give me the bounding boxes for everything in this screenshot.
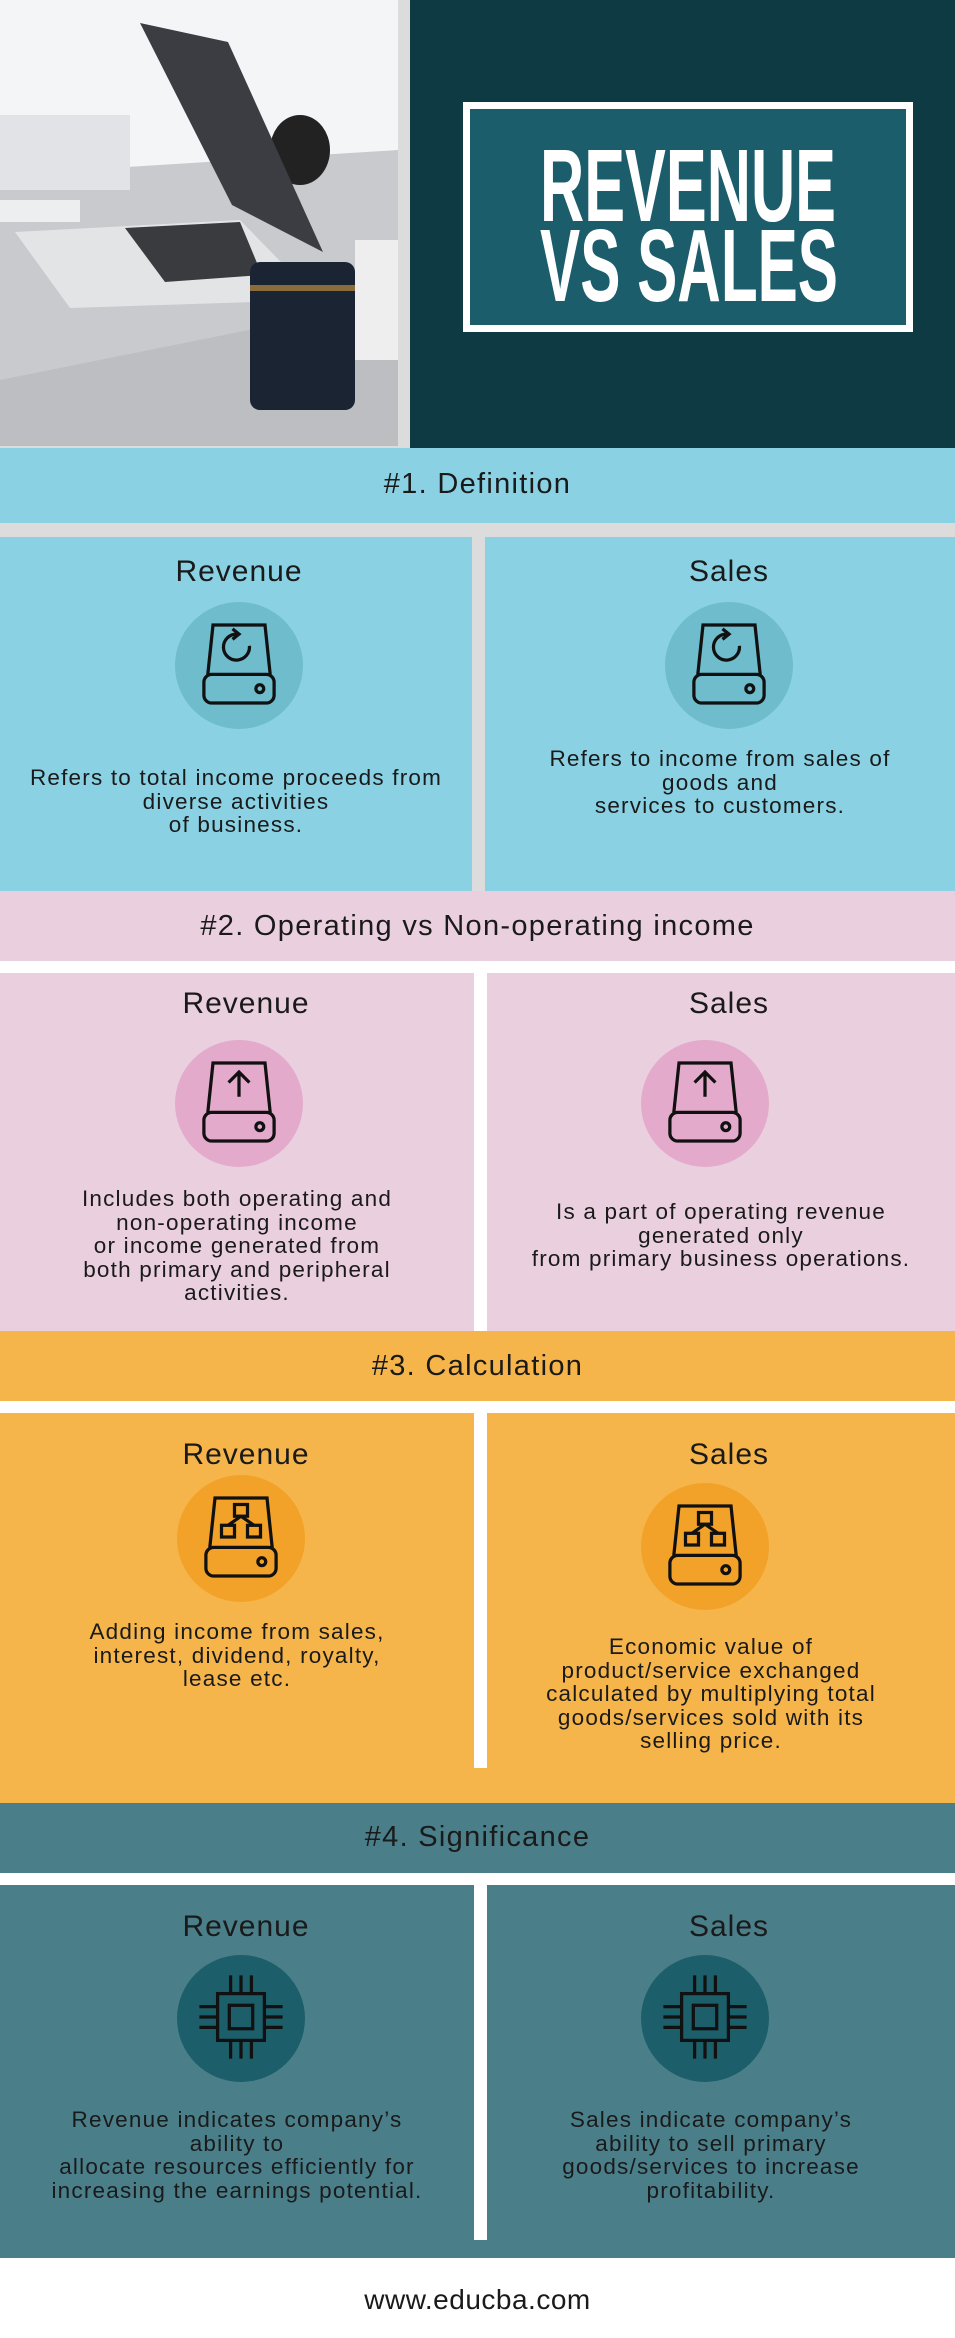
rev 2: activities. — [184, 1280, 290, 1305]
icon: drive network — [641, 1483, 769, 1610]
sales 4: Sales indicate company’s — [570, 2107, 852, 2132]
sales 1 — [549, 555, 891, 818]
rev 3: interest, dividend, royalty, — [93, 1642, 381, 1668]
hero photo: laptop on desk — [0, 0, 410, 448]
sales 3: selling price. — [640, 1728, 782, 1753]
sales 4: profitability. — [647, 2178, 775, 2202]
sales 4: ability to sell primary — [595, 2130, 827, 2156]
rev 1: of business. — [169, 812, 303, 837]
rev 3: Revenue — [182, 1438, 310, 1471]
rev 1: Revenue — [175, 555, 303, 588]
section 4 — [0, 1803, 955, 2258]
section 1: definition — [0, 448, 955, 891]
sales 2: generated only — [638, 1222, 804, 1248]
rev 4: Revenue — [182, 1910, 310, 1943]
icon: drive refresh — [175, 602, 303, 729]
sales 2: Is a part of operating revenue — [556, 1199, 886, 1224]
rev 2: Revenue — [182, 987, 310, 1020]
sales 1: Refers to income from sales of — [549, 746, 891, 771]
sales 1: Sales — [689, 555, 769, 588]
icon: drive upload — [175, 1040, 303, 1167]
rev 4: ability to — [190, 2130, 284, 2156]
sales 3: calculated by multiplying total — [546, 1681, 876, 1706]
sales 3 — [546, 1438, 876, 1753]
rev 4: Revenue indicates company’s — [72, 2107, 402, 2132]
rev 2: both primary and peripheral — [83, 1256, 391, 1282]
rev 2: non-operating income — [116, 1210, 358, 1234]
header 1 — [0, 448, 955, 523]
header 2: #2. Operating vs Non-operating income — [200, 910, 755, 942]
rev 4 — [51, 1910, 423, 2202]
sales 3: Economic value of — [609, 1634, 813, 1659]
sales 3: product/service exchanged — [562, 1658, 860, 1682]
header 4: #4. Significance — [365, 1821, 590, 1853]
rev 2: or income generated from — [94, 1233, 380, 1258]
header 3: #3. Calculation — [372, 1350, 583, 1382]
rev 1 — [30, 555, 442, 837]
sales 4 — [562, 1910, 860, 2202]
sales 2 — [532, 987, 910, 1271]
rev 4: allocate resources efficiently for — [59, 2154, 415, 2179]
rev 2: Includes both operating and — [82, 1186, 392, 1211]
rev 2 — [82, 987, 392, 1305]
section 2 — [0, 891, 955, 1331]
section 3 — [0, 1331, 955, 1803]
icon: drive network — [177, 1475, 305, 1602]
sales 1: goods and — [662, 770, 778, 794]
footer url: www.educba.com — [364, 2284, 591, 2315]
title box — [463, 102, 913, 332]
sales 4: goods/services to increase — [562, 2154, 860, 2179]
icon: drive refresh — [665, 602, 793, 729]
icon: chip — [641, 1955, 769, 2082]
sales 2: from primary business operations. — [532, 1246, 910, 1271]
sales 4: Sales — [689, 1910, 769, 1943]
icon: drive upload — [641, 1040, 769, 1167]
rev 4: increasing the earnings potential. — [51, 2178, 423, 2202]
rev 1: diverse activities — [143, 788, 329, 814]
text: #1. Definition — [384, 468, 571, 500]
rev 3: Adding income from sales, — [89, 1619, 385, 1644]
rev 1: Refers to total income proceeds from — [30, 765, 442, 790]
icon: chip — [177, 1955, 305, 2082]
rev 3 — [89, 1438, 385, 1691]
sales 2: Sales — [689, 987, 769, 1020]
sales 3: Sales — [689, 1438, 769, 1471]
sales 1: services to customers. — [595, 793, 845, 818]
title panel — [410, 0, 955, 448]
sales 3: goods/services sold with its — [558, 1704, 864, 1730]
rev 3: lease etc. — [183, 1666, 291, 1691]
